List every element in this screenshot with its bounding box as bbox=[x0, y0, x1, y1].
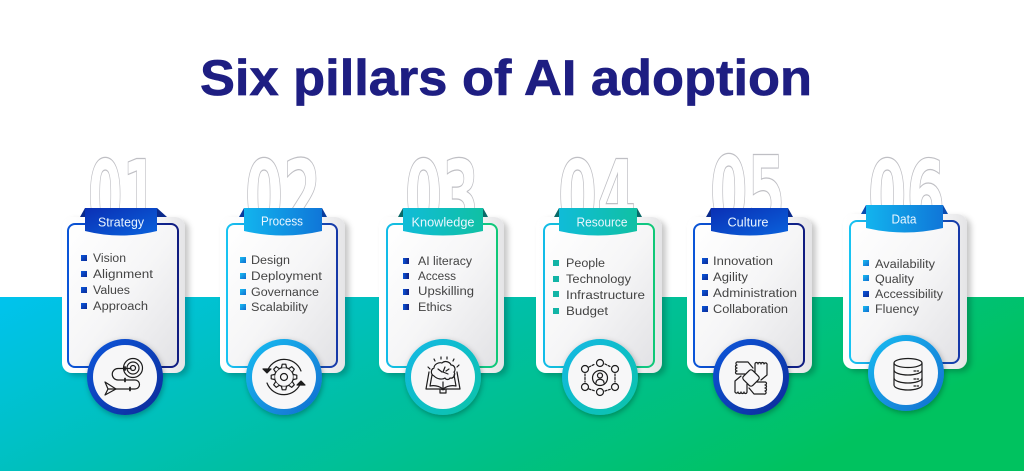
list bbox=[403, 256, 474, 314]
card outer bbox=[220, 217, 345, 373]
panel: data bbox=[843, 140, 967, 411]
panel: process bbox=[220, 140, 345, 415]
list: Infrastructure bbox=[566, 290, 645, 302]
list: Design bbox=[251, 255, 290, 267]
panel: culture bbox=[687, 136, 812, 415]
list: Innovation bbox=[713, 256, 773, 268]
list: Vision bbox=[93, 253, 126, 265]
list: AI literacy bbox=[418, 256, 472, 268]
number 01: 01 bbox=[88, 140, 157, 254]
list bbox=[702, 256, 797, 316]
list: Alignment bbox=[93, 269, 154, 281]
card inner bbox=[68, 224, 178, 367]
icon circle ring bbox=[868, 335, 944, 411]
card outer bbox=[379, 217, 504, 373]
card outer bbox=[536, 217, 662, 373]
number 02: 02 bbox=[245, 140, 321, 254]
list bbox=[240, 255, 323, 314]
panel: strategy bbox=[62, 140, 185, 415]
list: Collaboration bbox=[713, 304, 788, 316]
title: Six pillars of AI adoption bbox=[200, 50, 812, 106]
label: Strategy bbox=[98, 216, 145, 230]
number 06: 06 bbox=[868, 140, 945, 254]
icon circle face bbox=[411, 345, 475, 409]
icon circle ring bbox=[562, 339, 638, 415]
list: Administration bbox=[713, 288, 797, 300]
card inner bbox=[227, 224, 337, 367]
list: Technology bbox=[566, 274, 631, 286]
card inner bbox=[850, 221, 959, 363]
ribbon wings bbox=[554, 208, 642, 217]
ribbon wings bbox=[706, 208, 793, 217]
list: Values bbox=[93, 285, 130, 297]
icon: database bbox=[894, 358, 922, 390]
card inner bbox=[387, 224, 497, 367]
icon circle ring bbox=[713, 339, 789, 415]
icon: target with winding arrow bbox=[105, 358, 142, 395]
label: Process bbox=[261, 214, 303, 228]
list: Budget bbox=[566, 306, 609, 318]
label: Data bbox=[892, 212, 917, 226]
list bbox=[863, 259, 943, 316]
icon circle ring bbox=[87, 339, 163, 415]
panel: resource bbox=[536, 140, 662, 415]
ribbon wings bbox=[861, 205, 948, 214]
icon: gear with rotating arrows bbox=[263, 359, 305, 395]
list: Quality bbox=[875, 274, 914, 286]
icon: four joined hands bbox=[735, 362, 767, 394]
list: Approach bbox=[93, 301, 148, 313]
icon: people network bbox=[582, 360, 618, 396]
card outer bbox=[62, 217, 185, 373]
icon circle ring bbox=[246, 339, 322, 415]
ribbon bbox=[866, 205, 943, 232]
list: Upskilling bbox=[418, 286, 474, 298]
list: Availability bbox=[875, 259, 935, 271]
number 04: 04 bbox=[558, 140, 636, 254]
number 05: 05 bbox=[710, 136, 785, 250]
icon circle face bbox=[874, 341, 938, 405]
ribbon bbox=[711, 208, 788, 236]
background: gradient band bbox=[0, 297, 1024, 471]
card outer bbox=[843, 214, 967, 369]
list bbox=[81, 253, 154, 313]
card inner bbox=[544, 224, 654, 367]
label: Resource bbox=[576, 216, 628, 230]
label: Culture bbox=[728, 216, 769, 230]
list: Scalability bbox=[251, 302, 308, 314]
ribbon bbox=[85, 208, 157, 236]
ribbon bbox=[403, 208, 483, 236]
icon circle face bbox=[93, 345, 157, 409]
card inner bbox=[694, 224, 804, 367]
list: Deployment bbox=[251, 271, 323, 283]
label: Knowledge bbox=[412, 216, 475, 230]
icon circle ring bbox=[405, 339, 481, 415]
icon circle face bbox=[568, 345, 632, 409]
ribbon wings bbox=[239, 208, 327, 217]
background: white top bbox=[0, 0, 1024, 297]
list: Ethics bbox=[418, 302, 452, 314]
list: Governance bbox=[251, 287, 319, 299]
list: Access bbox=[418, 271, 456, 283]
ribbon bbox=[244, 208, 322, 236]
number 03: 03 bbox=[405, 140, 479, 254]
list: People bbox=[566, 258, 605, 270]
list: Accessibility bbox=[875, 289, 943, 301]
panel: knowledge bbox=[379, 140, 504, 415]
icon: brain over open book bbox=[426, 357, 460, 393]
list: Agility bbox=[713, 272, 748, 284]
ribbon wings bbox=[80, 208, 167, 217]
ribbon wings bbox=[398, 208, 488, 217]
ribbon bbox=[559, 208, 637, 236]
card outer bbox=[687, 217, 812, 373]
icon circle face bbox=[719, 345, 783, 409]
list bbox=[553, 258, 645, 318]
icon circle face bbox=[252, 345, 316, 409]
list: Fluency bbox=[875, 304, 919, 316]
